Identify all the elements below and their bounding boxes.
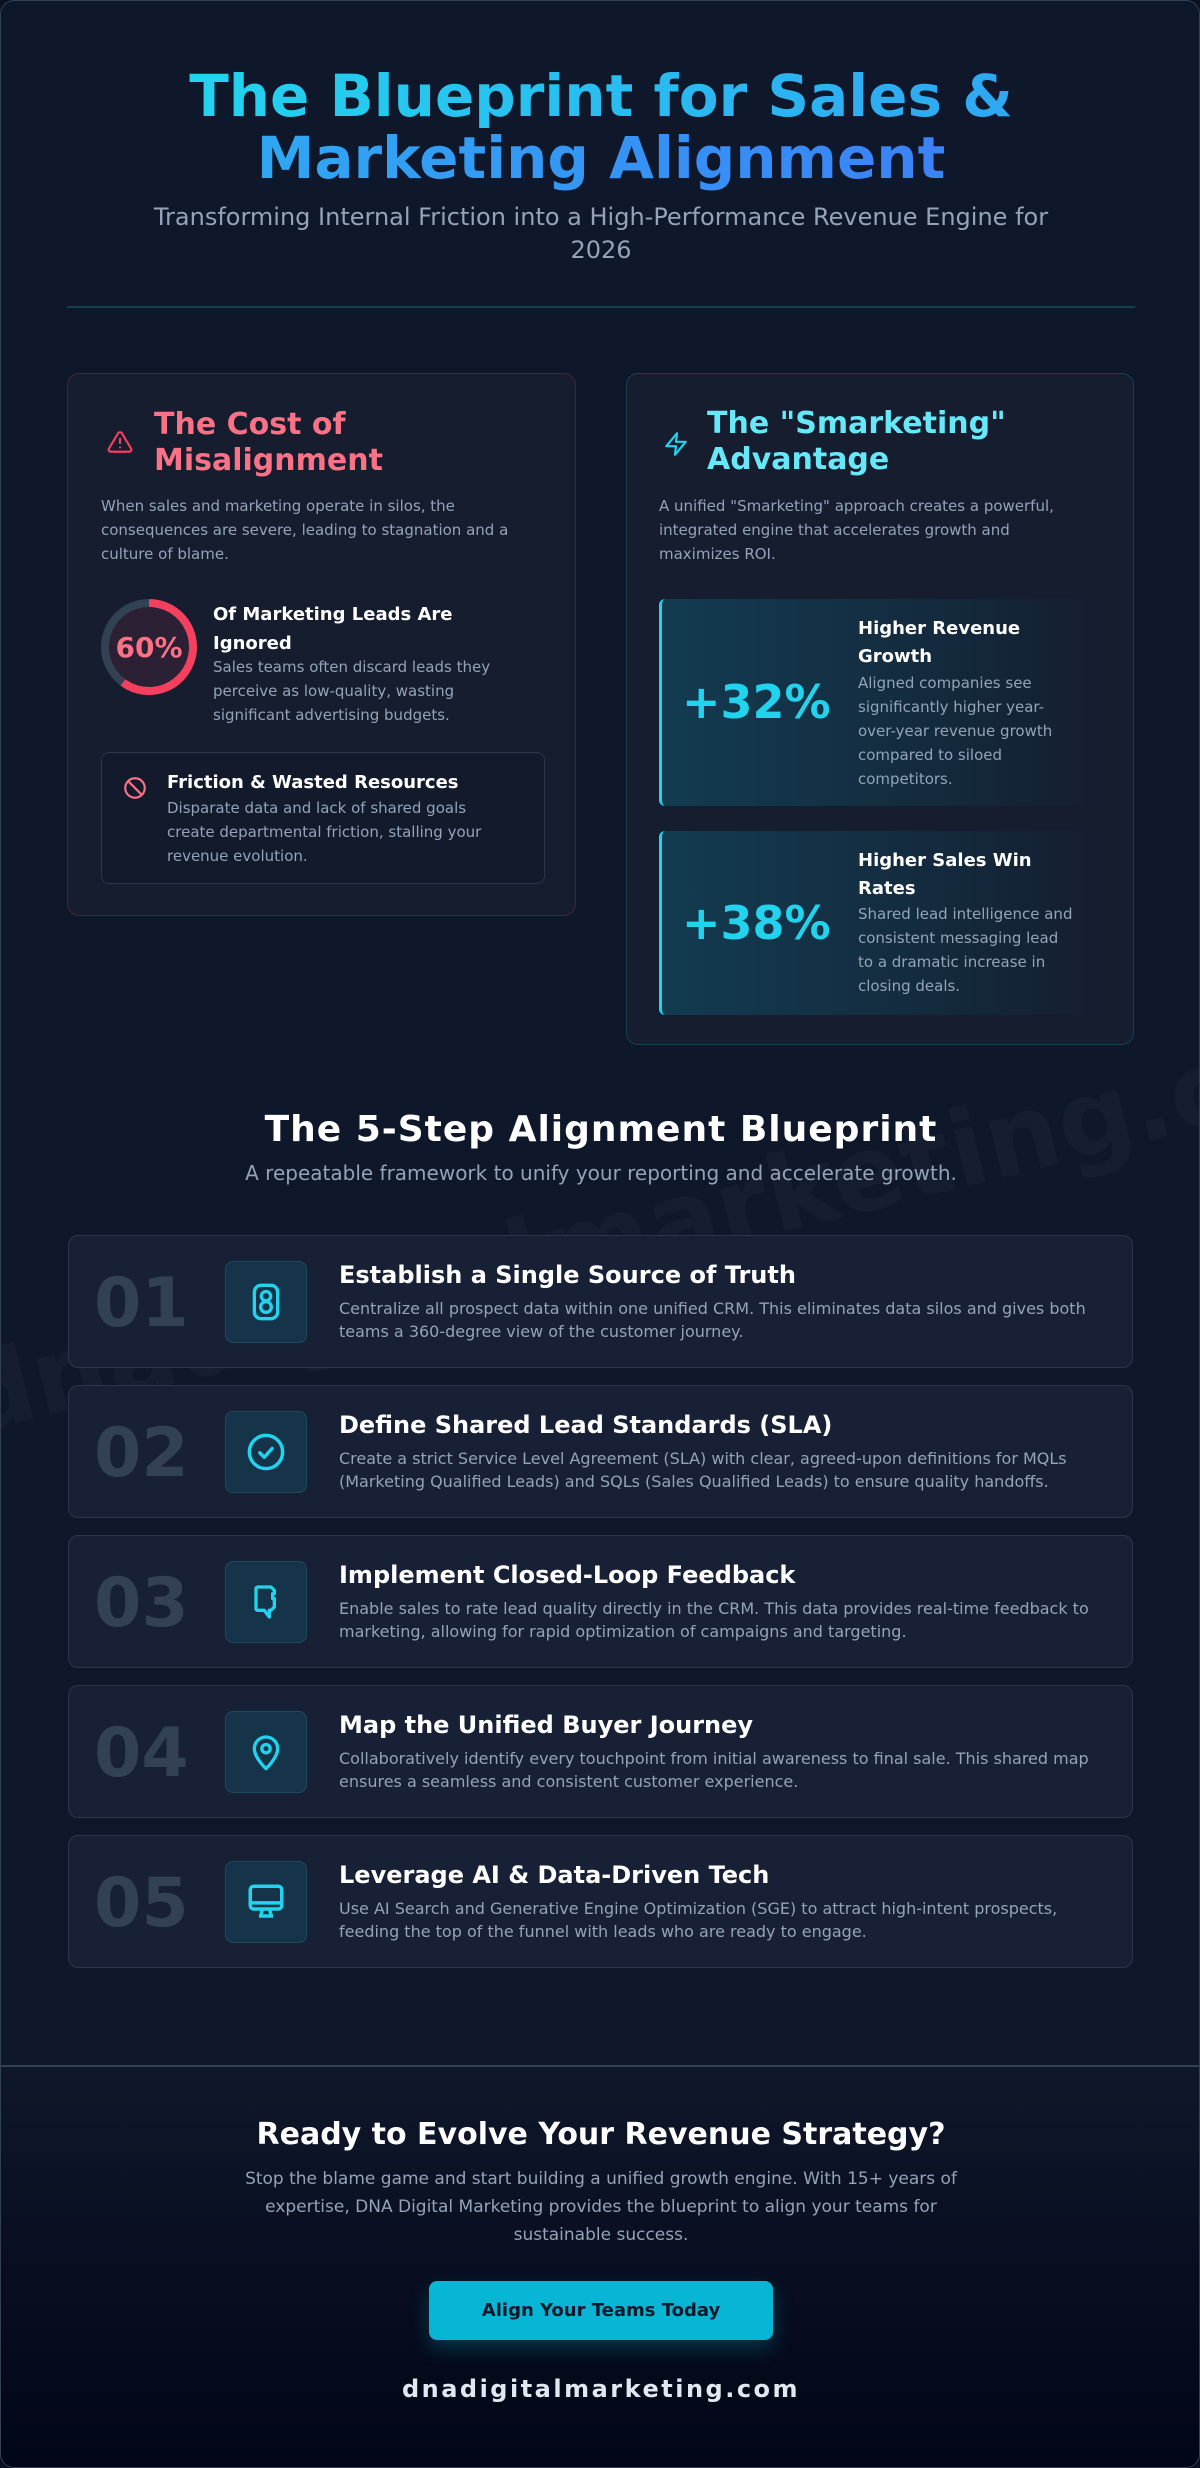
step 03 xyxy=(68,1535,1133,1668)
button: Align Your Teams Today xyxy=(482,2300,720,2321)
stat card: +32%: Higher Revenue Growth xyxy=(858,618,1020,667)
title xyxy=(189,62,1013,192)
step 02: Create a strict Service Level Agreement (SLA) with clear, agreed-upon definitions for MQLs (Marketing Qualified Leads) and SQLs (Sales Qualified Leads) to ensure quality handoffs. xyxy=(339,1449,1067,1491)
panel: smarketing advantage xyxy=(626,373,1134,1045)
icon: warning xyxy=(108,431,132,453)
panel: cost of misalignment xyxy=(67,373,576,916)
step 01 xyxy=(68,1235,1133,1368)
step 03: Implement Closed-Loop Feedback xyxy=(339,1561,795,1589)
stat: leads ignored: Sales teams often discard leads they perceive as low-quality, wasting significant advertising budgets. xyxy=(213,658,490,724)
stat card: +32%: Aligned companies see significantly higher year-over-year revenue growth compared to siloed competitors. xyxy=(858,674,1052,788)
callout: friction: Friction & Wasted Resources xyxy=(167,772,459,793)
heading: 5-step blueprint: The 5-Step Alignment Blueprint xyxy=(265,1109,937,1150)
text: smarketing intro: A unified "Smarketing" approach creates a powerful, integrated engine that accelerates growth and maximizes ROI. xyxy=(659,497,1054,563)
stat card: +38%: Higher Sales Win Rates xyxy=(858,850,1032,899)
text: blueprint subtitle: A repeatable framework to unify your reporting and accelerate growth. xyxy=(245,1161,957,1185)
heading: CTA: Ready to Evolve Your Revenue Strategy? xyxy=(256,2117,946,2152)
step 02: Define Shared Lead Standards (SLA) xyxy=(339,1411,832,1439)
domain: dnadigitalmarketing.com xyxy=(402,2375,800,2403)
icon: map pin xyxy=(225,1711,307,1793)
stat: leads ignored: Of Marketing Leads Are Ignored xyxy=(213,604,452,654)
stat: leads ignored xyxy=(213,604,490,724)
step 01: Centralize all prospect data within one unified CRM. This eliminates data silos and gives both teams a 360-degree view of the customer journey. xyxy=(339,1299,1086,1341)
subtitle: Transforming Internal Friction into a High-Performance Revenue Engine for 2026 xyxy=(154,203,1048,264)
chart: 60% donut xyxy=(101,599,197,695)
button xyxy=(429,2281,773,2340)
step 04: 04 xyxy=(94,1714,189,1793)
step 05 xyxy=(68,1835,1133,1968)
heading: cost xyxy=(154,407,383,478)
icon: monitor xyxy=(225,1861,307,1943)
stat card: +32% xyxy=(659,599,1103,806)
heading: smarketing xyxy=(707,406,1006,477)
icon: database xyxy=(225,1261,307,1343)
step 03: 03 xyxy=(94,1564,189,1643)
heading: smarketing: The "Smarketing" xyxy=(707,406,1006,441)
icon: check circle xyxy=(225,1411,307,1493)
icon: zap xyxy=(665,432,687,456)
icon: ban xyxy=(124,777,146,799)
step 02: 02 xyxy=(94,1414,189,1493)
icon: message xyxy=(225,1561,307,1643)
title: The Blueprint for Sales & xyxy=(189,62,1013,130)
step 02 xyxy=(68,1385,1133,1518)
step 03: Enable sales to rate lead quality directly in the CRM. This data provides real-time feedback to marketing, allowing for rapid optimization of campaigns and targeting. xyxy=(339,1599,1089,1641)
stat card: +38%: +38% xyxy=(682,896,831,950)
step 04 xyxy=(68,1685,1133,1818)
stat card: +38%: Shared lead intelligence and consistent messaging lead to a dramatic increase in closing deals. xyxy=(858,905,1072,995)
step 05: Use AI Search and Generative Engine Optimization (SGE) to attract high-intent prospects, feeding the top of the funnel with leads who are ready to engage. xyxy=(339,1899,1057,1941)
footer CTA xyxy=(1,2065,1200,2468)
step 04: Collaboratively identify every touchpoint from initial awareness to final sale. This shared map ensures a seamless and consistent customer experience. xyxy=(339,1749,1089,1791)
callout: friction xyxy=(101,752,545,884)
heading: cost: Misalignment xyxy=(154,443,383,478)
step 05: Leverage AI & Data-Driven Tech xyxy=(339,1861,769,1889)
callout: friction: Disparate data and lack of shared goals create departmental friction, stalling your revenue evolution. xyxy=(167,799,481,865)
stat card: +38% xyxy=(659,831,1103,1015)
step 01: Establish a Single Source of Truth xyxy=(339,1261,796,1289)
heading: smarketing: Advantage xyxy=(707,442,889,477)
heading: cost: The Cost of xyxy=(154,407,346,442)
title: Marketing Alignment xyxy=(257,124,945,192)
step 05: 05 xyxy=(94,1864,189,1943)
text: CTA body: Stop the blame game and start building a unified growth engine. With 15+ years of expertise, DNA Digital Marketing provides the blueprint to align your teams for sustainable success. xyxy=(245,2169,957,2245)
text: cost intro: When sales and marketing operate in silos, the consequences are severe, leading to stagnation and a culture of blame. xyxy=(101,497,508,563)
step 01: 01 xyxy=(94,1264,189,1343)
chart: 60% donut: 60% xyxy=(115,631,183,664)
stat card: +32%: +32% xyxy=(682,675,831,729)
step 04: Map the Unified Buyer Journey xyxy=(339,1711,753,1739)
